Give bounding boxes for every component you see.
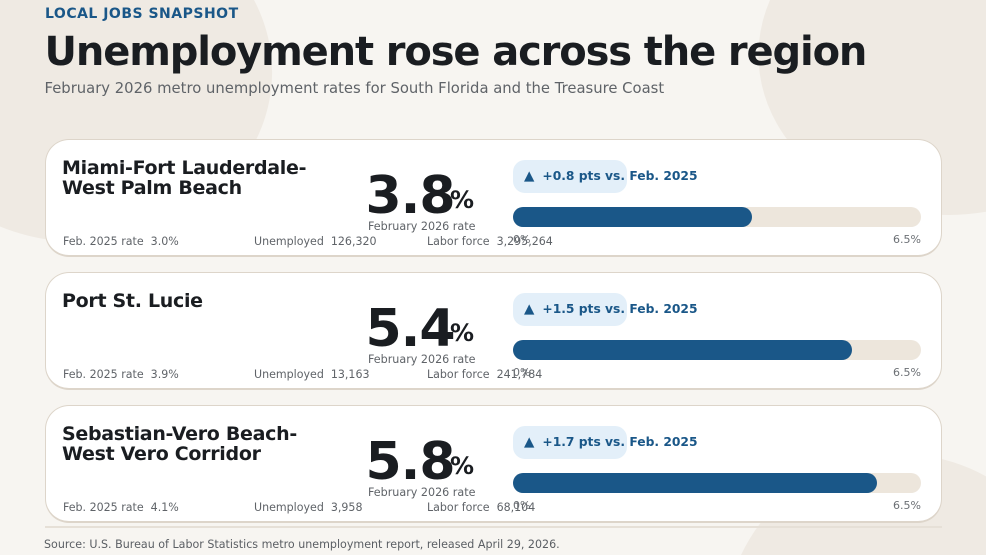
- change text: +0.8 pts vs. Feb. 2025: [542, 169, 698, 183]
- stat: labor force: Labor force 3,295,264: [427, 235, 553, 248]
- rate caption: February 2026 rate: [368, 220, 475, 233]
- stat: labor force: Labor force 241,784: [427, 368, 542, 381]
- metro name: Port St. Lucie: [62, 290, 203, 312]
- stat: unemployed: Unemployed 13,163: [254, 368, 370, 381]
- stat: prior year rate: Feb. 2025 rate 3.0%: [63, 235, 179, 248]
- panel: Miami-Fort Lauderdale-West Palm Beach: [45, 139, 942, 257]
- headline rate: 5.4: [366, 299, 455, 359]
- bar chart: 5.8 of 6.5: [513, 473, 921, 493]
- bar chart: 5.4 of 6.5: [513, 340, 921, 360]
- change text: +1.5 pts vs. Feb. 2025: [542, 302, 698, 316]
- decorative blob: top left: [0, 0, 272, 242]
- bar chart: 3.8 of 6.5: [513, 207, 921, 227]
- change pill: [513, 160, 627, 193]
- axis maximum: 6.5%: [893, 499, 921, 512]
- subtitle: February 2026 metro unemployment rates for South Florida and the Treasure Coast: [44, 80, 664, 97]
- axis maximum: 6.5%: [893, 366, 921, 379]
- stat: labor force: Labor force 68,104: [427, 501, 535, 514]
- panel: Port St. Lucie: [45, 272, 942, 390]
- axis minimum: 0%: [513, 499, 530, 512]
- change text: ▲: [524, 168, 534, 184]
- change pill: [513, 293, 627, 326]
- headline rate: 3.8: [366, 166, 455, 226]
- headline rate: %: [450, 452, 474, 480]
- metro name: Miami-Fort Lauderdale- West Palm Beach: [62, 156, 306, 198]
- metro name: Sebastian-Vero Beach- West Vero Corridor: [62, 422, 297, 464]
- source note: Source: U.S. Bureau of Labor Statistics metro unemployment report, released April 29, 2026.: [44, 538, 560, 551]
- change text: +1.7 pts vs. Feb. 2025: [542, 435, 698, 449]
- rate caption: February 2026 rate: [368, 353, 475, 366]
- headline rate: %: [450, 186, 474, 214]
- change text: ▲: [524, 301, 534, 317]
- panel: Sebastian-Vero Beach-West Vero Corridor: [45, 405, 942, 523]
- rate caption: February 2026 rate: [368, 486, 475, 499]
- stat: unemployed: Unemployed 126,320: [254, 235, 377, 248]
- headline rate: %: [450, 319, 474, 347]
- axis maximum: 6.5%: [893, 233, 921, 246]
- change pill: [513, 426, 627, 459]
- eyebrow label: LOCAL JOBS SNAPSHOT: [45, 6, 239, 22]
- axis minimum: 0%: [513, 233, 530, 246]
- decorative blob: bottom right: [741, 454, 986, 555]
- stat: unemployed: Unemployed 3,958: [254, 501, 362, 514]
- title: Unemployment rose across the region: [44, 29, 866, 75]
- headline rate: 5.8: [366, 432, 455, 492]
- stat: prior year rate: Feb. 2025 rate 3.9%: [63, 368, 179, 381]
- change text: ▲: [524, 434, 534, 450]
- stat: prior year rate: Feb. 2025 rate 4.1%: [63, 501, 179, 514]
- axis minimum: 0%: [513, 366, 530, 379]
- decorative blob: top right: [758, 0, 986, 215]
